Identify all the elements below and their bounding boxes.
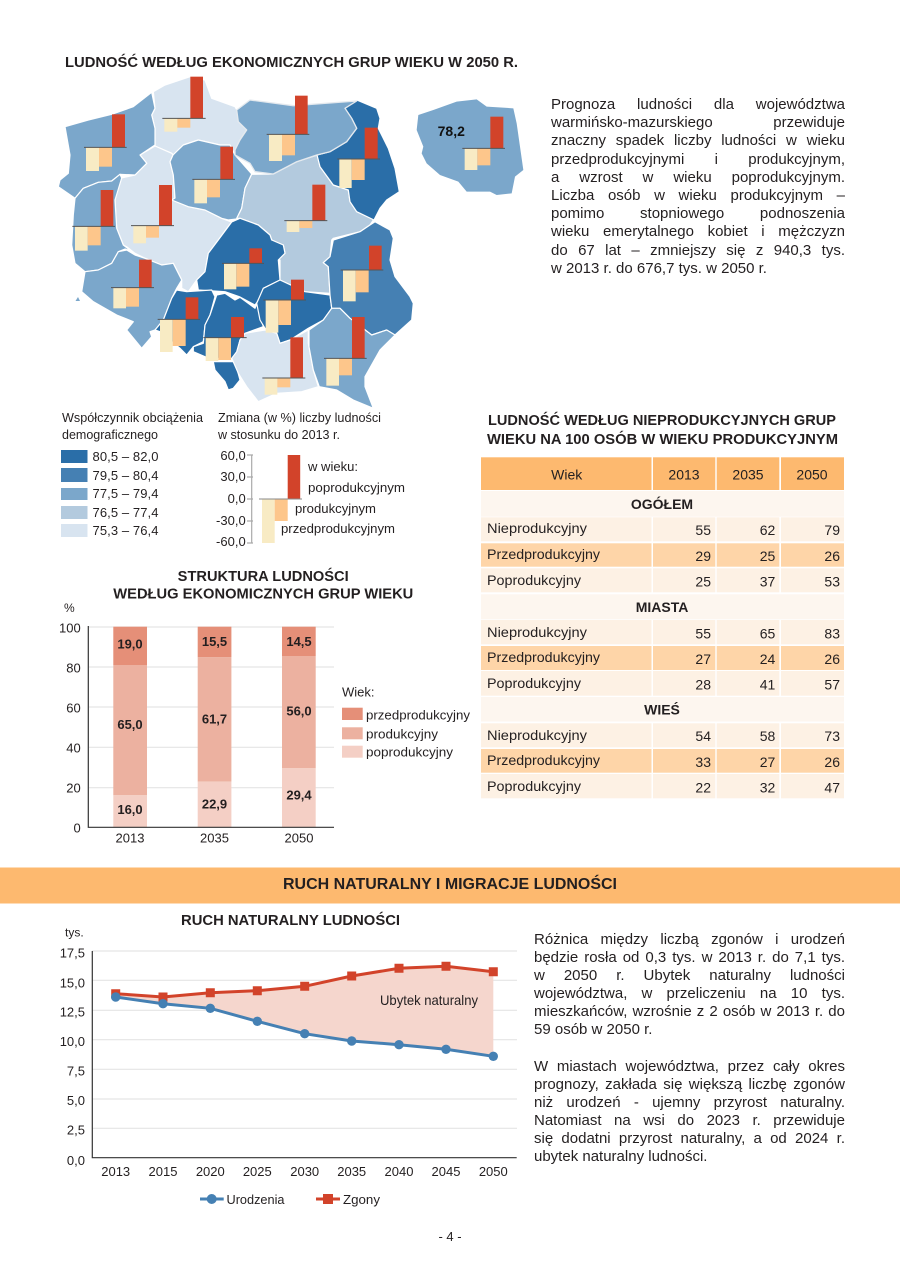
section: WIEŚ: 54: [695, 728, 711, 744]
legend: population change bars: -30,0: [216, 513, 246, 528]
legend: age groups: [342, 685, 471, 760]
section: OGÓŁEM: 53: [824, 574, 840, 590]
line chart: births and deaths: 17,5: [60, 945, 85, 960]
section: MIASTA: Nieprodukcyjny: [487, 624, 587, 640]
section: MIASTA: 55: [695, 626, 711, 642]
text block: forecast: a wzrost w wieku poprodukcyjnym.: [551, 169, 845, 186]
stacked bar chart: population structure: 2035: [200, 830, 229, 845]
line chart: births and deaths: 7,5: [67, 1064, 85, 1079]
text block: forecast: przedprodukcyjnymi i produkcyjnym,: [551, 151, 845, 168]
text block: natural change: ubytek naturalny ludności.: [534, 1148, 707, 1165]
line chart: births and deaths: 2015: [149, 1164, 177, 1179]
legend: dependency ratio: 75,3 – 76,4: [92, 523, 158, 538]
line chart: births and deaths: 2040: [385, 1164, 413, 1179]
section: WIEŚ: 47: [824, 780, 840, 796]
section: MIASTA: 57: [824, 676, 840, 692]
section: OGÓŁEM: [481, 491, 844, 592]
line chart: births and deaths: 2020: [196, 1164, 225, 1179]
stacked bar chart: population structure: %: [64, 601, 75, 615]
stacked bar chart: population structure: 2050: [285, 830, 313, 845]
text block: natural change: się dodatni przyrost naturalny, a od 2024 r.: [534, 1130, 845, 1147]
legend: population change bars: 0,0: [228, 491, 246, 506]
section: WIEŚ: Przedprodukcyjny: [487, 752, 600, 768]
line chart: births and deaths: [60, 926, 517, 1179]
section: MIASTA: 65: [760, 626, 776, 642]
legend: dependency ratio: 79,5 – 80,4: [92, 468, 158, 483]
series: births: [111, 992, 498, 1061]
bar 2013: 65,0: [117, 717, 143, 732]
table header: 2035: [732, 466, 764, 482]
stacked bar chart: population structure: 2013: [116, 830, 144, 845]
legend: line chart: [200, 1192, 381, 1207]
text block: natural change: Różnica między liczbą zgonów i urodzeń: [534, 931, 845, 948]
legend: population change bars: 30,0: [220, 469, 246, 484]
legend: dependency ratio: demograficznego: [62, 427, 158, 442]
section: WIEŚ: Nieprodukcyjny: [487, 727, 587, 743]
stacked bar chart: population structure: [59, 601, 334, 845]
bar 2035: 15,5: [202, 634, 227, 649]
stacked bar chart: population structure: 60: [66, 701, 81, 716]
table header: 2050: [796, 466, 828, 482]
section: MIASTA: 28: [695, 676, 711, 692]
section: OGÓŁEM: Nieprodukcyjny: [487, 520, 587, 536]
section: OGÓŁEM: 79: [824, 522, 840, 538]
section: WIEŚ: 27: [760, 754, 776, 770]
text block: natural change: będzie rosła od 0,3 tys. w 2013 r. do 7,1 tys.: [534, 949, 845, 966]
section: WIEŚ: 33: [695, 754, 711, 770]
legend: dependency ratio: 77,5 – 79,4: [92, 486, 158, 501]
text block: natural change: w 2050 r. Ubytek naturalny ludności: [534, 967, 845, 984]
text block: natural change: województwa, w przeliczeniu na 10 tys.: [534, 985, 845, 1002]
series: deaths: [111, 962, 498, 1002]
bar 2050: 29,4: [286, 787, 312, 802]
bar 2035: 22,9: [202, 796, 227, 811]
stacked bar chart: population structure: 20: [66, 781, 81, 796]
legend: population change bars: produkcyjnym: [295, 501, 376, 516]
heading: structure chart: [113, 567, 413, 602]
line chart: births and deaths: 2025: [243, 1164, 272, 1179]
section: MIASTA: Przedprodukcyjny: [487, 649, 600, 665]
section: MIASTA: 27: [695, 651, 711, 667]
section: MIASTA: Poprodukcyjny: [487, 675, 581, 691]
text block: forecast: Prognoza ludności dla województwa: [551, 96, 845, 113]
section: MIASTA: MIASTA: [636, 599, 688, 615]
line chart: births and deaths: 10,0: [60, 1034, 85, 1049]
text block: natural change: mieszkańców, wzrośnie z 2 osób w 2013 r. do: [534, 1003, 845, 1020]
legend: population change bars: Zmiana (w %) liczby ludności: [218, 410, 381, 425]
section: MIASTA: 24: [760, 651, 776, 667]
legend: line chart: Urodzenia: [226, 1192, 285, 1207]
line chart: births and deaths: 0,0: [67, 1153, 85, 1168]
text block: forecast: pomimo stopniowego podnoszenia: [551, 205, 845, 222]
line chart: births and deaths: 5,0: [67, 1093, 85, 1108]
line chart: births and deaths: 12,5: [60, 1005, 85, 1020]
shaded area: natural decrease: [116, 966, 493, 1056]
section: OGÓŁEM: Poprodukcyjny: [487, 572, 581, 588]
legend: population change bars: poprodukcyjnym: [308, 480, 405, 495]
section: OGÓŁEM: Przedprodukcyjny: [487, 546, 600, 562]
legend: age groups: Wiek:: [342, 685, 374, 700]
bar 2050: 56,0: [286, 703, 312, 718]
legend: population change bars: przedprodukcyjnym: [281, 521, 395, 536]
section: WIEŚ: [481, 697, 844, 798]
section banner: [0, 868, 900, 904]
line chart: births and deaths: tys.: [65, 926, 84, 940]
section: WIEŚ: Poprodukcyjny: [487, 778, 581, 794]
legend: dependency ratio: 76,5 – 77,4: [92, 505, 158, 520]
line chart: births and deaths: 2030: [290, 1164, 319, 1179]
table header: 2013: [668, 466, 700, 482]
table: non-productive age groups: [481, 457, 844, 798]
text block: natural change: 59 osób w 2050 r.: [534, 1021, 652, 1038]
table header: [481, 457, 844, 490]
table header: Wiek: [551, 466, 583, 482]
bar 2050: 14,5: [286, 634, 312, 649]
text block: forecast: do 67 lat – zmniejszy się z 940,3 tys.: [551, 242, 845, 259]
section: OGÓŁEM: 25: [760, 548, 776, 564]
stacked bar chart: population structure: 40: [66, 741, 81, 756]
legend: line chart: Zgony: [343, 1192, 381, 1207]
value: Poland 78,2: 78,2: [438, 123, 465, 139]
section: WIEŚ: 32: [760, 780, 776, 796]
line chart: births and deaths: 2013: [101, 1164, 130, 1179]
section: OGÓŁEM: 55: [695, 522, 711, 538]
legend: population change bars: w wieku:: [307, 459, 358, 474]
stacked bar chart: population structure: 100: [59, 620, 81, 635]
small Poland map: [417, 99, 523, 195]
text block: natural change: prognozy, zakłada się większą liczbę zgonów: [534, 1076, 845, 1093]
section: WIEŚ: 22: [695, 780, 711, 796]
bar 2013: 16,0: [117, 802, 143, 817]
text block: forecast: warmińsko-mazurskiego przewiduje: [551, 114, 845, 131]
text block: natural change: Natomiast na wsi do 2023 r. przewiduje: [534, 1112, 845, 1129]
legend: dependency ratio: [61, 410, 204, 538]
section: MIASTA: [481, 594, 844, 696]
bar charts on regions: [72, 77, 505, 395]
section: MIASTA: 26: [824, 651, 840, 667]
section: OGÓŁEM: 62: [760, 522, 776, 538]
section: MIASTA: 83: [824, 626, 840, 642]
text block: natural change: W miastach województwa, przez cały okres: [534, 1058, 845, 1075]
text block: forecast: Liczba osób w wieku produkcyjnym –: [551, 187, 845, 204]
legend: dependency ratio: Współczynnik obciążenia: [62, 410, 204, 425]
voivodeship regions: [58, 77, 413, 408]
heading: table: [487, 411, 838, 448]
section: OGÓŁEM: 26: [824, 548, 840, 564]
text block: forecast: wieku emerytalnego kobiet i mężczyzn: [551, 223, 845, 240]
bar 2035: [198, 627, 231, 827]
line chart: births and deaths: 2045: [432, 1164, 460, 1179]
bar 2050: [282, 627, 316, 827]
label: natural decrease: Ubytek naturalny: [380, 992, 478, 1008]
section: WIEŚ: 58: [760, 728, 776, 744]
page number: - 4 -: [438, 1229, 462, 1244]
legend: population change bars: 60,0: [220, 448, 246, 463]
legend: population change bars: -60,0: [216, 534, 246, 549]
title: map: LUDNOŚĆ WEDŁUG EKONOMICZNYCH GRUP WIEKU W 2050 R.: [65, 53, 518, 71]
bar 2013: 19,0: [117, 636, 143, 651]
legend: age groups: produkcyjny: [366, 726, 439, 741]
text block: forecast: w 2013 r. do 676,7 tys. w 2050 r.: [551, 260, 767, 277]
heading: structure chart: STRUKTURA LUDNOŚCI: [178, 567, 349, 585]
section: WIEŚ: WIEŚ: [644, 700, 680, 718]
legend: population change bars: w stosunku do 2013 r.: [217, 427, 340, 442]
section: OGÓŁEM: 25: [695, 574, 711, 590]
section: WIEŚ: 73: [824, 728, 840, 744]
section: OGÓŁEM: 37: [760, 574, 776, 590]
section: OGÓŁEM: 29: [695, 548, 711, 564]
text block: natural change: niż urodzeń - ujemny przyrost naturalny.: [534, 1094, 845, 1111]
line chart: births and deaths: 2050: [479, 1164, 508, 1179]
section: WIEŚ: 26: [824, 754, 840, 770]
line chart: births and deaths: 2,5: [67, 1122, 85, 1137]
legend: population change bars: [216, 410, 405, 549]
line chart: births and deaths: 15,0: [60, 975, 85, 990]
text block: forecast: znaczny spadek liczby ludności w wieku: [551, 132, 845, 149]
heading: line chart: RUCH NATURALNY LUDNOŚCI: [181, 911, 400, 929]
section: MIASTA: 41: [760, 676, 776, 692]
text block: natural change: [534, 931, 845, 1165]
text block: forecast: [551, 96, 845, 277]
bar 2035: 61,7: [202, 711, 227, 726]
heading: structure chart: WEDŁUG EKONOMICZNYCH GRUP WIEKU: [113, 586, 413, 602]
legend: dependency ratio: 80,5 – 82,0: [92, 449, 158, 464]
heading: table: LUDNOŚĆ WEDŁUG NIEPRODUKCYJNYCH GRUP: [488, 411, 836, 429]
stacked bar chart: population structure: 80: [66, 661, 81, 676]
legend: age groups: przedprodukcyjny: [366, 707, 471, 722]
stacked bar chart: population structure: 0: [73, 821, 81, 836]
map of Poland with voivodeship bar charts: [58, 77, 523, 408]
legend: age groups: poprodukcyjny: [366, 745, 454, 760]
line chart: births and deaths: 2035: [337, 1164, 366, 1179]
bar 2013: [113, 627, 147, 827]
section: OGÓŁEM: OGÓŁEM: [631, 495, 693, 512]
heading: table: WIEKU NA 100 OSÓB W WIEKU PRODUKCYJNYM: [487, 430, 838, 448]
section banner: RUCH NATURALNY I MIGRACJE LUDNOŚCI: [283, 874, 617, 893]
